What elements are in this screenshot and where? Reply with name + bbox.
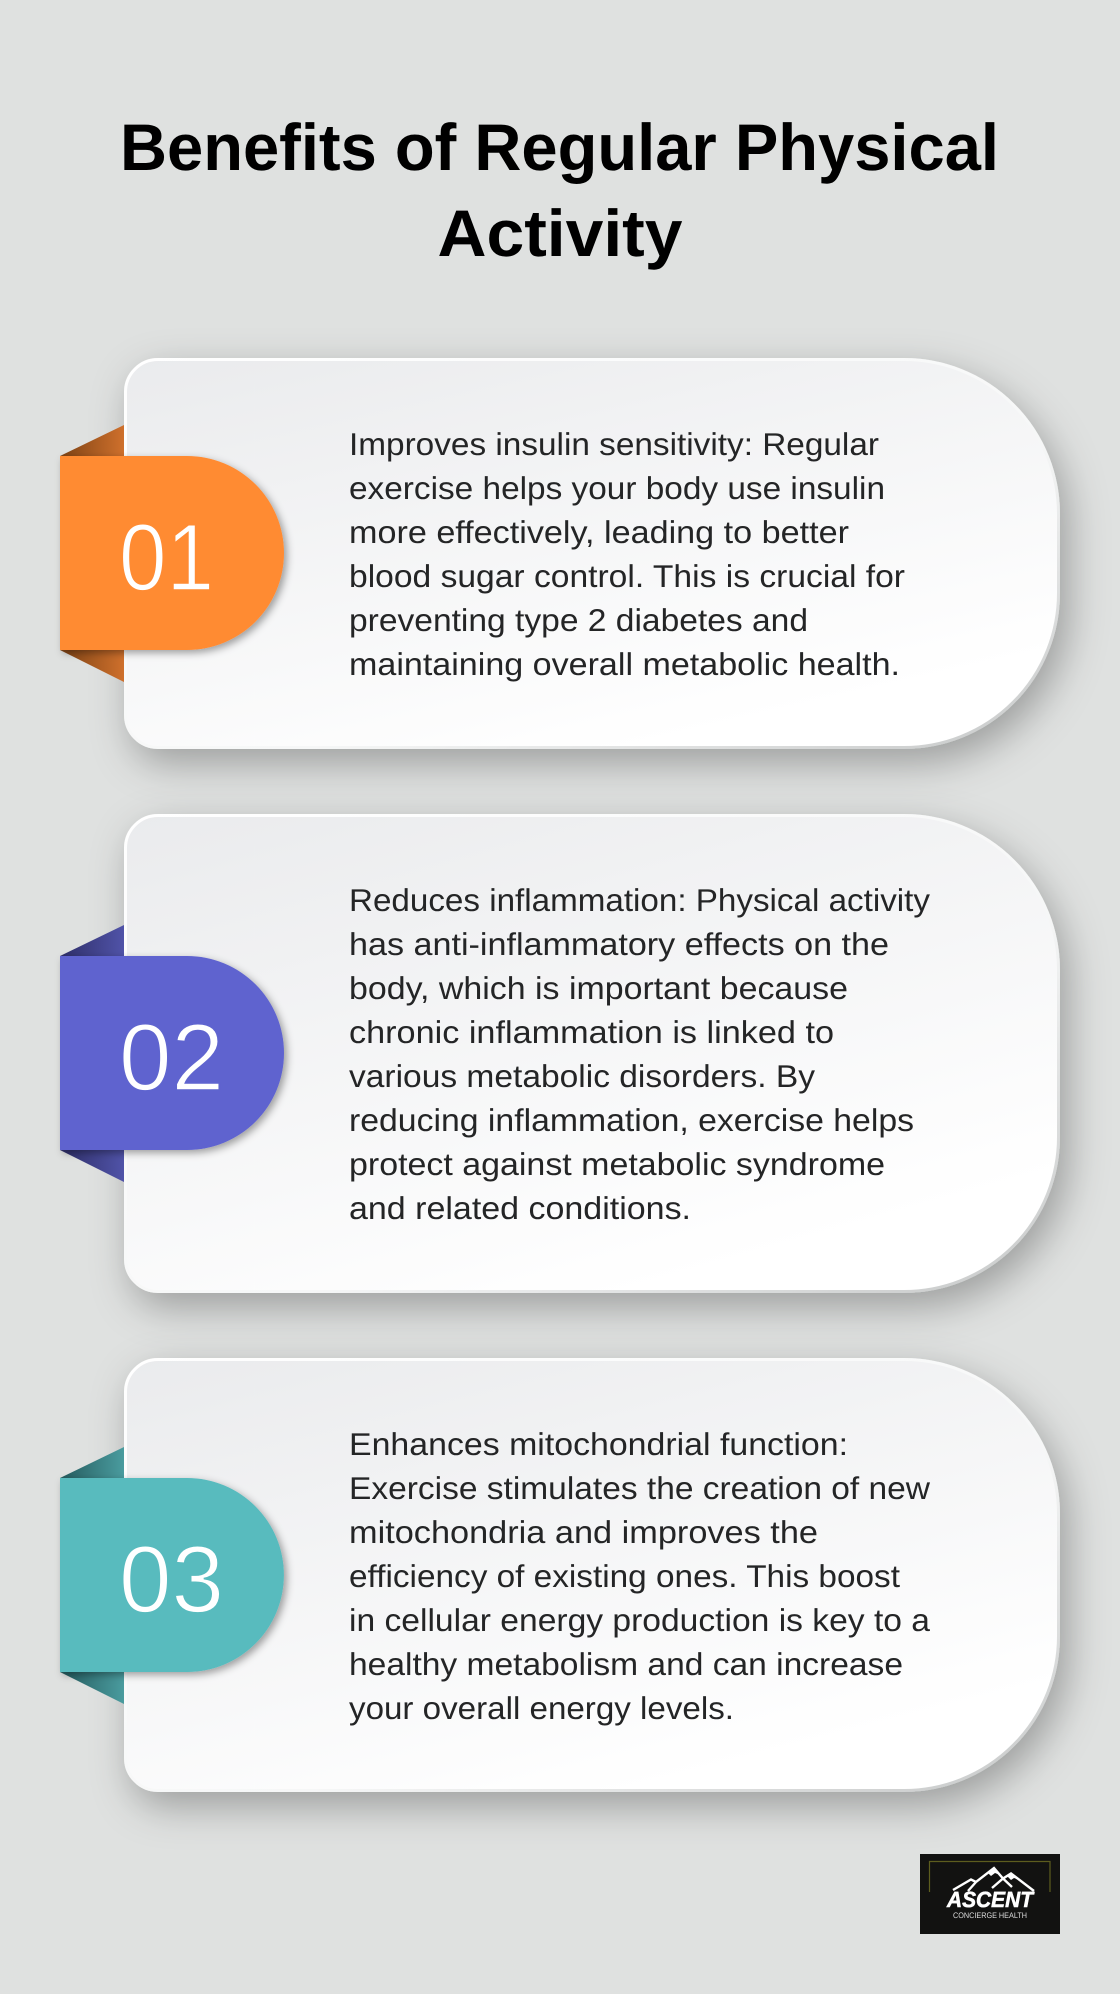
title: Benefits of Regular Physical [120, 110, 999, 184]
number 02: 02 [119, 1005, 224, 1111]
card 1 text [349, 426, 905, 682]
card 2 number badge [60, 956, 284, 1150]
card 1 text: preventing type 2 diabetes and [349, 602, 808, 638]
card 1 number badge [60, 456, 284, 650]
card 1 background [126, 360, 1058, 748]
card 1 text: exercise helps your body use insulin [349, 470, 885, 506]
card 1 text: Improves insulin sensitivity: Regular [349, 426, 879, 462]
card 3 background [126, 1360, 1058, 1790]
logo: Ascent Concierge Health [920, 1854, 1060, 1934]
card 3 text: in cellular energy production is key to a [349, 1602, 931, 1638]
card 1 text: maintaining overall metabolic health. [349, 646, 900, 682]
card 3 ribbon folds [60, 1447, 124, 1704]
card 2 ribbon folds [60, 925, 124, 1182]
card 3 text: Enhances mitochondrial function: [349, 1426, 848, 1462]
card 3 text: Exercise stimulates the creation of new [349, 1470, 930, 1506]
card 2 background [126, 816, 1058, 1292]
panel: card 2 inflammation [60, 816, 1058, 1292]
card 3 text: your overall energy levels. [349, 1690, 734, 1726]
card 3 text: efficiency of existing ones. This boost [349, 1558, 900, 1594]
card 2 text: chronic inflammation is linked to [349, 1014, 834, 1050]
card 2 text: body, which is important because [349, 970, 848, 1006]
number 01: 01 [119, 505, 214, 611]
number 03: 03 [119, 1527, 224, 1633]
card 2 text: and related conditions. [349, 1190, 691, 1226]
card 2 text: has anti-inflammatory effects on the [349, 926, 889, 962]
card 1 text: more effectively, leading to better [349, 514, 849, 550]
panel: card 1 insulin sensitivity [60, 360, 1058, 748]
card 3 text: healthy metabolism and can increase [349, 1646, 903, 1682]
card 2 text: various metabolic disorders. By [349, 1058, 815, 1094]
card 2 text: Reduces inflammation: Physical activity [349, 882, 930, 918]
card 3 number badge [60, 1478, 284, 1672]
logo wordmark: ASCENT [946, 1887, 1034, 1912]
panel: card 3 mitochondrial function [60, 1360, 1058, 1790]
card 3 text [349, 1426, 931, 1726]
title [120, 110, 999, 270]
card 2 text: protect against metabolic syndrome [349, 1146, 885, 1182]
card 2 text: reducing inflammation, exercise helps [349, 1102, 914, 1138]
title: Activity [438, 196, 683, 270]
card 1 text: blood sugar control. This is crucial for [349, 558, 905, 594]
icon: mountains [953, 1868, 1034, 1891]
logo tagline: CONCIERGE HEALTH [953, 1911, 1027, 1920]
card 3 text: mitochondria and improves the [349, 1514, 818, 1550]
card 1 ribbon folds [60, 425, 124, 682]
card 2 text [349, 882, 930, 1226]
